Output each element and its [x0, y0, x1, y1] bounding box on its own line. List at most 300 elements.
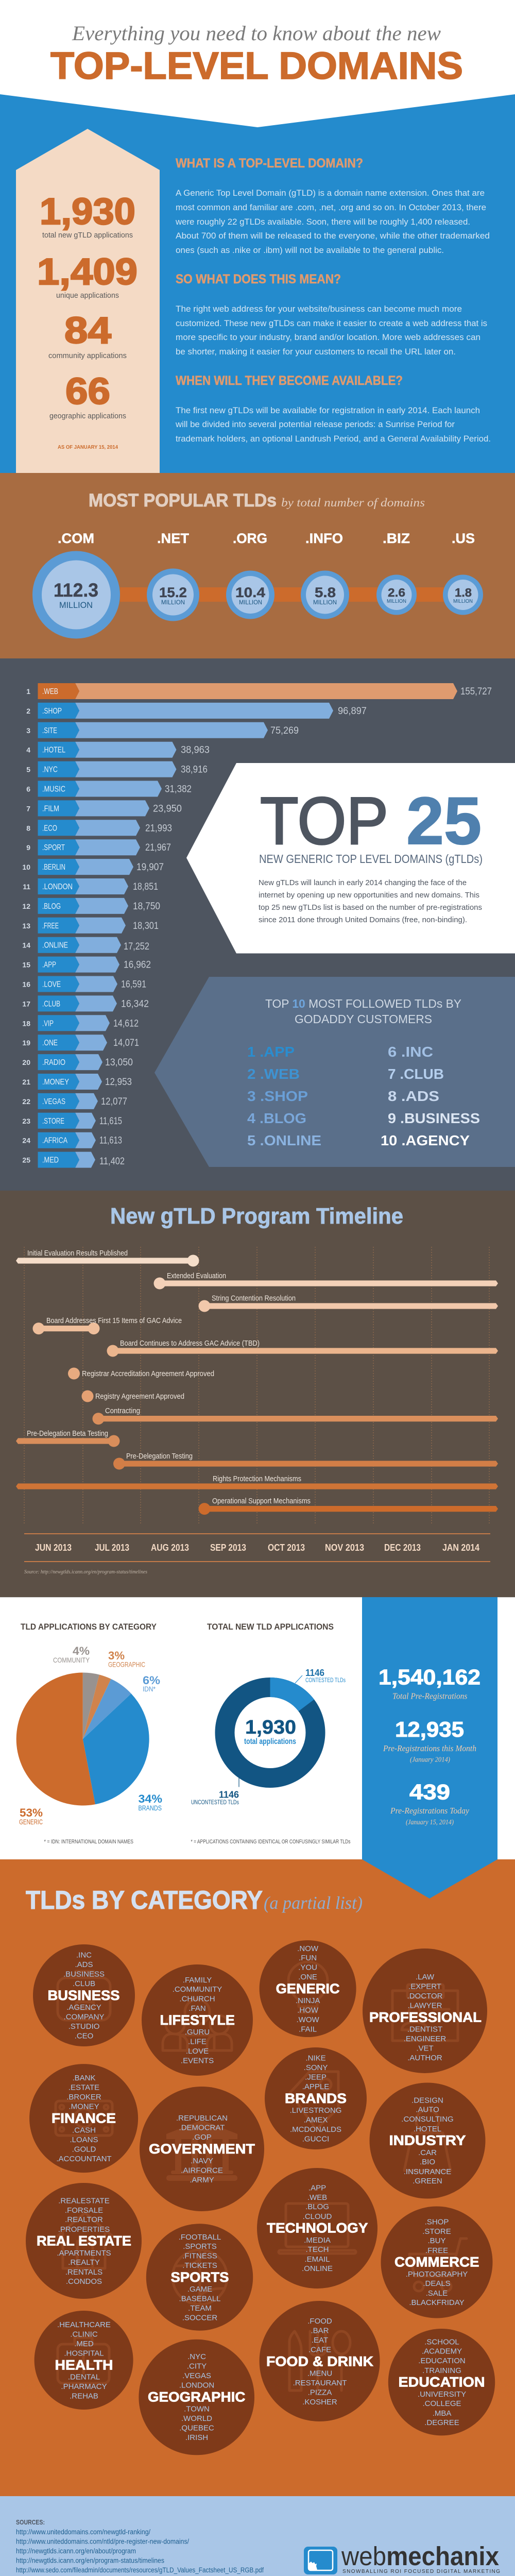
- bubble: professional: .LAWYER: [408, 2001, 442, 2010]
- bubble: generic: .WOW: [297, 2015, 320, 2024]
- bubble: education: [388, 2329, 495, 2435]
- text block: so what does this mean: more specific to your industry, brand and/or location. More web addresses can: [176, 332, 480, 342]
- bubble: education: .ACADEMY: [422, 2347, 462, 2356]
- bar row 10: .berlin: [22, 859, 164, 875]
- bubble: brands: .SONY: [304, 2063, 328, 2072]
- bubble: health: .HOSPITAL: [64, 2349, 104, 2358]
- bubble: lifestyle: .FAMILY: [183, 1976, 212, 1985]
- bubble: technology: .TECH: [306, 2245, 329, 2254]
- date note: AS OF JANUARY 15, 2014: [58, 444, 118, 450]
- bubble: generic: .FAIL: [299, 2025, 317, 2034]
- bubble: finance: .ESTATE: [68, 2083, 99, 2092]
- panel: timeline: [0, 1191, 515, 1597]
- bubble: generic: .YOU: [298, 1963, 317, 1972]
- bubble: commerce: .PHOTOGRAPHY: [406, 2270, 468, 2279]
- bubble: professional: .DOCTOR: [407, 1992, 443, 2001]
- bar row 24: .africa: [22, 1132, 122, 1148]
- bubble: real estate: REAL ESTATE: [37, 2233, 131, 2249]
- donut chart: total new TLD applications: [191, 1622, 351, 1845]
- bubble: technology: [257, 2168, 377, 2289]
- bubble: finance: .BROKER: [66, 2093, 101, 2102]
- bubble: industry: .AUTO: [416, 2106, 439, 2114]
- bubble: food and drink: .MENU: [307, 2369, 332, 2378]
- stat: total applications: total new gTLD applications: [42, 231, 133, 240]
- label: IDN: [143, 1674, 160, 1693]
- bar row 23: .store: 11,615: [99, 1116, 122, 1127]
- timeline axis: months: JAN 2014: [442, 1543, 479, 1553]
- bar row 18: .vip: [22, 1015, 139, 1031]
- bar row 15: .app: .APP: [42, 961, 56, 970]
- bar row 4: .hotel: 38,963: [181, 745, 210, 756]
- stat: pre-registrations this month: (January 2014): [410, 1756, 450, 1764]
- bubble: commerce: .SHOP: [425, 2217, 449, 2227]
- text block: so what does this mean: [176, 272, 487, 357]
- bar row 21: .money: 12,953: [105, 1077, 132, 1088]
- label: geographic: GEOGRAPHIC: [108, 1660, 145, 1668]
- bar row 14: .online: [22, 937, 149, 953]
- timeline bar: initial evaluation: [16, 1249, 199, 1266]
- bar row 18: .vip: .VIP: [42, 1019, 54, 1028]
- bubble: brands: BRANDS: [285, 2091, 347, 2106]
- bubble: technology: .CLOUD: [303, 2212, 332, 2221]
- bubble: education: .EDUCATION: [418, 2357, 466, 2365]
- bar row 13: .free: .FREE: [42, 922, 59, 930]
- bar row 2: .shop: 2: [26, 707, 30, 715]
- timeline axis: months: OCT 2013: [268, 1543, 305, 1553]
- bubble: lifestyle: .LOVE: [186, 2047, 209, 2056]
- stat: pre-registrations today: [390, 1780, 469, 1826]
- bubble: real estate: .REALESTATE: [58, 2197, 110, 2205]
- bar row 14: .online: 14: [22, 941, 30, 950]
- bar row 3: .site: 3: [26, 726, 30, 735]
- bubble: sports: .GAME: [187, 2285, 212, 2294]
- bar row 20: .radio: .RADIO: [42, 1058, 65, 1067]
- bubble: finance: .MONEY: [68, 2102, 99, 2111]
- list: ranks 6 to 10: [381, 1044, 480, 1148]
- bar row 11: .london: .LONDON: [42, 883, 73, 891]
- timeline point: registrar accreditation: [68, 1367, 214, 1380]
- bubble: .info: 5.8: [315, 585, 336, 600]
- timeline bar: rights protection: Rights Protection Mechanisms: [213, 1475, 301, 1483]
- label: community: 4%: [73, 1645, 90, 1657]
- timeline bar: string contention: [199, 1294, 498, 1312]
- timeline bar: initial evaluation: Initial Evaluation Results Published: [27, 1249, 128, 1258]
- icon: first aid kit: [58, 2337, 109, 2383]
- bubble: generic: .NOW: [297, 1944, 319, 1953]
- bubble: government: .AIRFORCE: [181, 2166, 223, 2175]
- timeline point: registrar accreditation: Registrar Accreditation Agreement Approved: [82, 1369, 214, 1378]
- heading: TLDs by category: TLDs BY CATEGORY: [26, 1886, 263, 1914]
- stat: unique applications: 1,409: [37, 251, 138, 293]
- bubble: professional: .VET: [416, 2044, 434, 2053]
- label: generic: 53%: [20, 1806, 43, 1819]
- heading: top 25: TOP: [260, 783, 388, 858]
- text block: top 25 description: since 2011 done through United Domains (free, non-binding).: [259, 916, 467, 924]
- timeline axis: months: AUG 2013: [151, 1543, 189, 1553]
- bar row 25: .med: 11,402: [99, 1156, 125, 1167]
- stat: total pre-registrations: [379, 1665, 480, 1701]
- timeline bar: pre-delegation testing: Pre-Delegation Testing: [126, 1452, 193, 1461]
- bubble: .us: [443, 531, 483, 615]
- bar row 10: .berlin: 19,907: [136, 862, 164, 873]
- bar row 1: .web: .WEB: [42, 687, 58, 696]
- text block: what is a top-level domain: WHAT IS A TOP-LEVEL DOMAIN?: [176, 156, 363, 171]
- bubble: sports: .BASEBALL: [179, 2295, 220, 2303]
- label: geographic: 3%: [108, 1649, 125, 1662]
- bubble: professional: .DENTIST: [407, 2025, 442, 2034]
- icon: clipboard: [392, 1985, 458, 2041]
- footnote: * = IDN: INTERNATIONAL DOMAIN NAMES: [44, 1839, 133, 1845]
- bar row 15: .app: [22, 957, 151, 973]
- list: ranks 6 to 10: 10 .AGENCY: [381, 1132, 470, 1148]
- bar row 6: .music: .MUSIC: [42, 785, 65, 793]
- bubble: technology: .WEB: [307, 2193, 327, 2202]
- subheading: NEW GENERIC TOP LEVEL DOMAINS (gTLDs): [259, 852, 483, 866]
- bubble: generic: .FUN: [299, 1954, 317, 1962]
- bar row 4: .hotel: [26, 742, 210, 758]
- bubble: food and drink: .EAT: [312, 2336, 328, 2345]
- bar row 6: .music: [26, 781, 192, 796]
- bubble: .net: MILLION: [161, 599, 185, 606]
- bar row 8: .eco: 8: [26, 824, 30, 832]
- bubble: .us: .US: [452, 531, 475, 546]
- bar row 21: .money: [22, 1074, 132, 1090]
- bar row 11: .london: 11: [23, 883, 30, 891]
- bubble: .info: MILLION: [313, 599, 337, 606]
- bubble: brands: .GUCCI: [302, 2134, 329, 2143]
- bubble: finance: .LOANS: [70, 2136, 98, 2144]
- bubble: finance: .GOLD: [72, 2145, 96, 2154]
- stat: total pre-registrations: 1,540,162: [379, 1665, 480, 1689]
- list: ranks 1 to 5: 4 .BLOG: [247, 1110, 306, 1126]
- bubble: education: .SCHOOL: [424, 2337, 459, 2346]
- stat: community applications: community applications: [48, 351, 127, 360]
- bar row 10: .berlin: 10: [22, 863, 30, 871]
- bar row 1: .web: 155,727: [460, 686, 492, 697]
- stat: community applications: 84: [64, 310, 111, 351]
- bubble: lifestyle: .FAN: [188, 2004, 206, 2013]
- bar row 23: .store: 23: [22, 1117, 30, 1125]
- bar row 6: .music: 31,382: [165, 784, 192, 794]
- bubble: food and drink: .KOSHER: [302, 2398, 337, 2406]
- timeline axis: months: SEP 2013: [210, 1543, 246, 1553]
- bar row 7: .film: 23,950: [153, 803, 182, 814]
- bar row 9: .sport: .SPORT: [42, 843, 65, 852]
- bubble: food and drink: .PIZZA: [308, 2388, 332, 2397]
- bubble: brands: .LIVESTRONG: [290, 2106, 341, 2115]
- heading: most popular TLDs: [89, 490, 425, 511]
- panel: top 25 intro: [186, 763, 515, 953]
- bubble: generic: GENERIC: [276, 1981, 340, 1996]
- bubble: food and drink: .FOOD: [307, 2317, 332, 2326]
- timeline bar: rights protection: [16, 1475, 498, 1489]
- timeline bar: operational support: Operational Support Mechanisms: [212, 1497, 311, 1505]
- icon: logo screen: [304, 2547, 337, 2574]
- bubble: lifestyle: .CHURCH: [179, 1995, 215, 2003]
- bubble: geographic: .QUEBEC: [179, 2424, 214, 2433]
- timeline bar: pre-delegation testing: [113, 1452, 498, 1469]
- bubble: food and drink: [260, 2301, 380, 2421]
- text block: so what does this mean: be shorter, making it easier for your customers to recall the URL later on.: [176, 347, 456, 357]
- heading: top 25: [260, 783, 482, 858]
- bubble: brands: [265, 2047, 367, 2149]
- timeline bar: string contention: String Contention Resolution: [212, 1294, 296, 1302]
- bubble: .us: 1.8: [455, 586, 472, 599]
- bubble: geographic: .LONDON: [179, 2381, 214, 2390]
- bar row 6: .music: 6: [26, 785, 30, 793]
- stat: pre-registrations this month: [383, 1717, 476, 1764]
- bar row 7: .film: .FILM: [42, 804, 59, 813]
- bar row 3: .site: [26, 722, 299, 738]
- timeline bar: board addresses GAC advice: Board Addresses First 15 Items of GAC Advice: [46, 1316, 182, 1325]
- bubble: real estate: .REALTOR: [65, 2215, 103, 2224]
- bar row 13: .free: 18,301: [133, 921, 159, 931]
- icon: people: [163, 1999, 232, 2050]
- bar row 19: .one: [22, 1035, 139, 1050]
- donut centre: total: total applications: [244, 1737, 296, 1746]
- bubble: real estate: [26, 2183, 142, 2299]
- bar row 21: .money: .MONEY: [42, 1078, 69, 1087]
- timeline bar: board addresses GAC advice: [33, 1316, 182, 1334]
- stat: community applications: [48, 310, 127, 360]
- label: community: [53, 1645, 90, 1664]
- bubble: industry: .BIO: [420, 2158, 435, 2166]
- bar row 2: .shop: .SHOP: [42, 707, 62, 716]
- bubble: food and drink: .CAFE: [308, 2345, 331, 2354]
- label: generic: [19, 1806, 43, 1826]
- bar row 12: .blog: 12: [22, 902, 30, 910]
- bubble: government: .DEMOCRAT: [179, 2123, 225, 2132]
- bubble: brands: .JEEP: [305, 2073, 327, 2081]
- callout: contested: CONTESTED TLDs: [305, 1676, 346, 1684]
- bubble: .net: 15.2: [159, 585, 187, 600]
- bubble: government: .REPUBLICAN: [176, 2114, 228, 2123]
- bubble: education: .MBA: [433, 2409, 451, 2418]
- bubble: business: .STUDIO: [68, 2022, 99, 2031]
- text block: when will they become available: trademark holders, an optional Landrush Period, and a General Availability Period.: [176, 434, 491, 444]
- bubble: sports: .FITNESS: [182, 2251, 217, 2261]
- label: brands: 34%: [138, 1792, 162, 1805]
- bubble: health: .HEALTHCARE: [57, 2320, 111, 2329]
- callout: uncontested: UNCONTESTED TLDs: [191, 1799, 239, 1806]
- bubble: lifestyle: .COMMUNITY: [173, 1985, 222, 1994]
- header: title: TOP-LEVEL DOMAINS: [50, 44, 463, 87]
- list: ranks 1 to 5: 5 .ONLINE: [247, 1132, 321, 1148]
- text block: what is a top-level domain: ones (such as .nike or .ibm) will not be available to the general public.: [176, 245, 444, 255]
- heading: most popular TLDs: MOST POPULAR TLDs: [89, 490, 277, 511]
- bar row 25: .med: .MED: [42, 1156, 59, 1165]
- bubble: technology: .ONLINE: [302, 2264, 333, 2273]
- bubble: industry: .CAR: [418, 2148, 437, 2157]
- stat: geographic applications: [49, 371, 126, 420]
- bubble: industry: .GREEN: [413, 2177, 442, 2185]
- bubble: geographic: .TOWN: [184, 2405, 210, 2414]
- stat: pre-registrations today: 439: [409, 1780, 450, 1804]
- bubble: generic: .HOW: [297, 2006, 319, 2014]
- bubble: .org: .ORG: [233, 531, 267, 546]
- bubble: education: .DEGREE: [424, 2418, 459, 2427]
- bubble: health: .REHAB: [70, 2392, 98, 2401]
- bubble: finance: FINANCE: [52, 2110, 116, 2126]
- bubble: .com: 112.3: [54, 580, 98, 601]
- icon: briefcase: [58, 1971, 110, 2020]
- bubble: .com: MILLION: [59, 600, 93, 610]
- bar row 15: .app: 15: [22, 961, 30, 969]
- bubble: finance: .CASH: [72, 2126, 96, 2135]
- bar row 24: .africa: 24: [22, 1137, 30, 1145]
- bubble: sports: SPORTS: [171, 2269, 229, 2285]
- bar row 5: .nyc: 5: [26, 766, 30, 774]
- bubble: education: .TRAINING: [422, 2366, 461, 2375]
- bubble: technology: TECHNOLOGY: [267, 2221, 368, 2236]
- bubble: business: .AGENCY: [66, 2003, 101, 2012]
- bubble: .info: .INFO: [305, 531, 343, 546]
- bar row 2: .shop: 96,897: [338, 706, 367, 717]
- callout: contested: 1146: [305, 1668, 324, 1678]
- bubble: commerce: .FREE: [425, 2246, 448, 2255]
- text block: what is a top-level domain: [175, 156, 490, 255]
- text block: when will they become available: will be divided into several potential release periods: a Sunrise Period for: [175, 419, 455, 429]
- bubble: commerce: .SALE: [426, 2289, 448, 2298]
- label: brands: BRANDS: [138, 1804, 162, 1812]
- icon: house: [58, 2213, 112, 2268]
- donut centre: total: 1,930: [245, 1717, 296, 1738]
- bubble: education: .UNIVERSITY: [418, 2390, 466, 2399]
- callout: contested: [295, 1668, 346, 1684]
- stat: total applications: 1,930: [40, 191, 135, 232]
- bubble: business: .BUSINESS: [63, 1970, 105, 1978]
- bubble: business: .CLUB: [73, 1979, 95, 1988]
- bubble: professional: .LAW: [416, 1973, 435, 1981]
- bubble: business: .INC: [76, 1951, 92, 1960]
- bar row 19: .one: .ONE: [42, 1039, 58, 1047]
- bar row 11: .london: [23, 878, 158, 894]
- bar row 18: .vip: 18: [22, 1019, 30, 1027]
- bar row 22: .vegas: [22, 1093, 127, 1109]
- bubble: sports: .SPORTS: [183, 2242, 217, 2251]
- stat: geographic applications: geographic applications: [49, 412, 126, 420]
- panel: pre-registrations ribbon: [362, 1597, 497, 1899]
- text block: sources: http://www.uniteddomains.com/ntld/pre-register-new-domains/: [16, 2538, 189, 2545]
- bar row 20: .radio: 20: [22, 1058, 30, 1066]
- bar row 16: .love: 16: [22, 980, 30, 988]
- bubble: business: .CEO: [75, 2031, 93, 2040]
- label: geographic: [108, 1649, 145, 1668]
- bubble: business: BUSINESS: [47, 1988, 119, 2003]
- bar row 14: .online: 17,252: [124, 941, 149, 952]
- bubble: .biz: 2.6: [388, 586, 405, 599]
- text block: sources: [16, 2518, 264, 2576]
- donut centre: total: [244, 1717, 296, 1746]
- panel: top 10 most followed: [154, 977, 515, 1167]
- bar row 11: .london: 18,851: [133, 882, 158, 892]
- bar row 4: .hotel: .HOTEL: [42, 746, 65, 755]
- icon: shopping cart: [409, 2239, 467, 2291]
- bar row 25: .med: [22, 1152, 125, 1168]
- list: ranks 1 to 5: 3 .SHOP: [247, 1088, 308, 1104]
- bubble: lifestyle: .EVENTS: [181, 2057, 214, 2065]
- pie chart: TLD applications by category: [16, 1622, 162, 1845]
- bar row 9: .sport: [26, 839, 171, 855]
- label: IDN: IDN*: [143, 1685, 156, 1693]
- timeline axis: months: JUN 2013: [35, 1543, 72, 1553]
- bubble: geographic: .IRISH: [185, 2433, 208, 2442]
- bubble: technology: .EMAIL: [304, 2255, 330, 2264]
- icon: worker: [404, 2110, 451, 2171]
- timeline bar: extended evaluation: Extended Evaluation: [167, 1272, 226, 1280]
- panel: footer: [0, 2496, 515, 2576]
- stat: pre-registrations today: (January 15, 2014): [406, 1819, 454, 1826]
- bar row 20: .radio: 13,050: [105, 1057, 133, 1068]
- logo: webmechanix: [304, 2541, 500, 2574]
- bubble: professional: .AUTHOR: [407, 2054, 442, 2062]
- bar row 20: .radio: [22, 1054, 133, 1070]
- label: brands: [138, 1792, 162, 1812]
- bar row 10: .berlin: .BERLIN: [42, 863, 65, 872]
- bubble: industry: .HOTEL: [414, 2125, 441, 2133]
- heading: timeline: New gTLD Program Timeline: [110, 1204, 403, 1229]
- bubble: professional: PROFESSIONAL: [369, 2009, 482, 2025]
- timeline axis: months: NOV 2013: [325, 1543, 364, 1553]
- text block: so what does this mean: The right web address for your website/business can become much more: [176, 304, 462, 314]
- bubble: lifestyle: .GURU: [185, 2028, 210, 2037]
- text block: so what does this mean: customized. These new gTLDs can make it easier to create a web address that is: [176, 318, 487, 328]
- stat: pre-registrations this month: Pre-Registrations this Month: [383, 1743, 476, 1753]
- bubble: commerce: .BUY: [427, 2236, 446, 2245]
- bubble: .org: [226, 531, 274, 619]
- bubble: health: .MED: [74, 2340, 94, 2348]
- bar row 16: .love: .LOVE: [42, 980, 61, 989]
- bar row 17: .club: 17: [22, 999, 30, 1008]
- text block: sources: http://newgtlds.icann.org/en/about/program: [16, 2547, 136, 2555]
- bubble: commerce: .BLACKFRIDAY: [409, 2298, 465, 2307]
- bar row 7: .film: 7: [26, 804, 30, 812]
- timeline point: registry agreement: [81, 1390, 184, 1402]
- bubble: professional: .EXPERT: [408, 1982, 441, 1991]
- bar row 24: .africa: .AFRICA: [42, 1137, 68, 1145]
- icon: banknote: [56, 2101, 112, 2136]
- bar row 12: .blog: .BLOG: [42, 902, 61, 911]
- callout: uncontested: [191, 1778, 239, 1806]
- list: ranks 1 to 5: 2 .WEB: [247, 1066, 300, 1082]
- panel: intro blue background: [0, 94, 515, 473]
- bubble: finance: .ACCOUNTANT: [56, 2155, 112, 2163]
- text block: top 25 description: New gTLDs will launch in early 2014 changing the face of the: [259, 878, 467, 887]
- bubble: brands: .MCDONALDS: [290, 2125, 341, 2134]
- bar row 23: .store: [22, 1113, 122, 1129]
- heading: top 10: GODADDY CUSTOMERS: [295, 1012, 432, 1026]
- label: generic: GENERIC: [19, 1818, 43, 1826]
- bar row 19: .one: 19: [22, 1039, 30, 1047]
- text block: what is a top-level domain: most common and familiar are .com, .net, .org and so on. In October 2013, there: [176, 202, 486, 212]
- stat: total pre-registrations: Total Pre-Registrations: [392, 1691, 468, 1701]
- label: IDN: 6%: [143, 1674, 160, 1687]
- bar row 13: .free: 13: [22, 922, 30, 930]
- source note: Source: http://newgtlds.icann.org/en/program-status/timelines: [24, 1569, 147, 1575]
- bubble: health: [35, 2311, 133, 2410]
- bubble: technology: .MEDIA: [304, 2236, 331, 2245]
- bubble: .biz: MILLION: [387, 599, 406, 604]
- bubble: sports: .SOCCER: [182, 2313, 217, 2323]
- icon: price tag: [290, 2072, 338, 2129]
- bubble: generic: [260, 1940, 356, 2037]
- heading: most popular TLDs: by total number of domains: [281, 496, 425, 509]
- bubble: health: .CLINIC: [70, 2330, 98, 2339]
- bubble: lifestyle: .LIFE: [188, 2037, 207, 2046]
- bubble: lifestyle: LIFESTYLE: [160, 2012, 235, 2028]
- stat: pre-registrations today: Pre-Registrations Today: [390, 1806, 469, 1816]
- bubble: government: .ARMY: [190, 2176, 214, 2184]
